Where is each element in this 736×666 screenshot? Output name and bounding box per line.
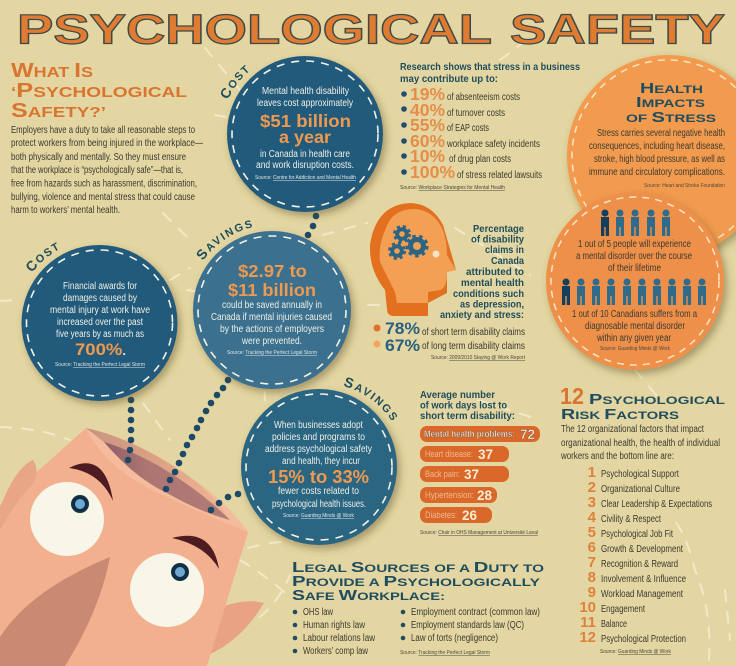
days lost bars — [420, 389, 540, 536]
label: cost: COST — [26, 242, 58, 271]
text: savings: $11 billion — [228, 280, 316, 300]
text: 1 of 10 — [572, 309, 697, 352]
heading: legal sources — [292, 560, 545, 604]
heading: what is — [11, 60, 187, 122]
text: 1 of 5: of their lifetime — [608, 263, 661, 274]
text: cost: Source: Tracking the Perfect Legal Storm — [55, 362, 145, 368]
claim stats — [374, 320, 526, 361]
text: 1 of 5: a mental disorder over the course — [576, 251, 692, 262]
law list: Law of torts (negligence) — [411, 633, 498, 644]
law list: Source: Tracking the Perfect Legal Storm — [400, 650, 490, 656]
labels: of drug plan costs — [449, 154, 511, 165]
text: cost: Source: Centre for Addiction and Mental Health — [255, 175, 356, 181]
heading: percentage: as depression, — [460, 298, 524, 310]
bullets — [401, 91, 407, 175]
text: cost: mental injury at work have — [50, 305, 150, 316]
numbers: 5 — [588, 524, 596, 541]
numbers: 2 — [588, 479, 596, 496]
heading: percentage: attributed to — [466, 266, 524, 278]
text: savings: $2.97 to — [238, 261, 307, 281]
law list: Employment standards law (QC) — [411, 620, 524, 631]
left eyebrow — [69, 463, 113, 501]
intro text — [560, 424, 720, 462]
numbers: 10 — [579, 599, 596, 616]
heading: average days: Average number — [420, 389, 495, 401]
stress text: Source: Heart and Stroke Foundation — [644, 183, 725, 189]
heading: what is: ‘PSYCHOLOGICAL — [11, 80, 187, 102]
numbers: 8 — [588, 569, 596, 586]
bar: heart disease: 37 — [478, 446, 493, 462]
text: savings: by the actions of employers — [220, 324, 324, 335]
heading: percentage: mental health — [461, 277, 524, 289]
heading: percentage: claims in — [485, 244, 524, 256]
labels — [400, 92, 542, 191]
text: savings: fewer costs related to — [278, 486, 359, 497]
percentages: 55% — [410, 115, 445, 135]
claim stats: of long term disability claims — [422, 341, 525, 352]
text: 1 of 10: Source: Guarding Minds @ Work — [600, 346, 670, 352]
percentages: 100% — [410, 162, 455, 182]
labels: of absenteeism costs — [447, 92, 520, 103]
paragraph: both physically and mentally. So they must ensure — [11, 152, 186, 163]
text: cost: five years by as much as — [56, 329, 144, 340]
orange circle: health impacts of stress — [567, 55, 736, 257]
rim band — [86, 428, 248, 532]
bar: hypertension: 28 — [477, 487, 492, 503]
bar: back pain: 37 — [464, 466, 479, 482]
bar: back pain — [420, 466, 509, 482]
circle: cost 51 billion — [220, 56, 390, 220]
factor list — [600, 469, 712, 655]
law list: Workers’ comp law — [303, 646, 369, 657]
text: cost: Financial awards for — [63, 281, 138, 292]
text: cost: leaves cost approximately — [257, 98, 353, 109]
paragraph: bullying, violence and mental stress that could cause — [11, 192, 195, 203]
text: cost: in Canada in health care — [260, 149, 350, 160]
risk factors — [560, 383, 725, 655]
factor list: Balance — [601, 619, 627, 630]
legal sources — [292, 560, 545, 657]
percentages: 10% — [410, 146, 445, 166]
numbers: 3 — [588, 494, 596, 511]
heading: percentage: Percentage — [473, 223, 524, 235]
text: savings: could be saved annually in — [222, 300, 322, 311]
text: 1 of 5 — [576, 239, 692, 274]
text: savings: Source: Tracking the Perfect Legal Storm — [227, 350, 317, 356]
gears — [390, 226, 427, 258]
factor list: Source: Guarding Minds @ Work — [600, 649, 671, 655]
heading: research: Research shows that stress in a business — [400, 62, 580, 73]
labels: of EAP costs — [447, 123, 489, 134]
text: savings: Source: Guarding Minds @ Work — [283, 513, 354, 519]
paragraph — [11, 125, 203, 216]
research stats — [400, 62, 580, 191]
heading: health impacts: IMPACTS — [636, 95, 705, 111]
text: 1 of 10: diagnosable mental disorder — [585, 321, 686, 332]
law list — [303, 607, 540, 657]
text: cost — [255, 86, 356, 181]
text: 1 of 10: within any given year — [596, 333, 672, 344]
factor list: Recognition & Reward — [601, 559, 678, 570]
heading: what is: SAFETY?’ — [11, 100, 106, 122]
percentages: 19% — [410, 84, 445, 104]
disability claims text — [374, 223, 526, 361]
heading: percentage: Canada — [491, 255, 524, 267]
text: savings: When businesses adopt — [274, 420, 363, 431]
factor list: Psychological Protection — [601, 634, 686, 645]
label: savings: SAVINGS — [196, 220, 252, 260]
title: SAFETY — [510, 6, 725, 52]
text: cost: $51 billion — [260, 111, 351, 131]
text: savings: psychological health issues. — [272, 499, 366, 510]
labels: of turnover costs — [447, 108, 505, 119]
text: savings — [265, 420, 372, 519]
labels: workplace safety incidents — [446, 139, 540, 150]
law list: Labour relations law — [303, 633, 376, 644]
numbers: 7 — [588, 554, 596, 571]
circle: cost 700 percent — [20, 242, 185, 410]
bar: heart disease: Heart disease: — [425, 449, 473, 460]
text: savings: were prevented. — [241, 336, 302, 347]
paragraph: harm to workers’ mental health. — [11, 205, 120, 216]
bar: heart disease — [420, 446, 509, 462]
claim stats: 67% — [385, 337, 420, 355]
bar: mental health — [420, 426, 540, 442]
claim stats: of short term disability claims — [422, 327, 525, 338]
text: cost: damages caused by — [63, 293, 137, 304]
heading: legal sources: L EGAL S OURCES OF A D UTY TO — [292, 560, 545, 576]
paragraph: Employers have a duty to take all reasonable steps to — [11, 125, 195, 136]
heading: percentage: conditions such — [453, 288, 524, 300]
factor list: Organizational Culture — [601, 484, 680, 495]
heading: 12 risk factors — [560, 383, 725, 423]
heading: health impacts — [626, 81, 716, 126]
text: savings: 15% to 33% — [268, 467, 369, 487]
source: days lost: Source: Chair in OHS Management at Université Laval — [420, 530, 538, 536]
right eyebrow — [172, 536, 219, 569]
text: savings: and health, they incur — [282, 456, 361, 467]
numbers — [579, 464, 597, 646]
factor list: Workload Management — [601, 589, 683, 600]
heading: research — [400, 62, 580, 85]
head icon with gears — [370, 203, 456, 316]
heading: health impacts: H EALTH — [640, 81, 703, 97]
text: cost: and work disruption costs. — [256, 160, 354, 171]
heading: percentage: anxiety and stress: — [440, 309, 524, 321]
text: cost: Mental health disability — [262, 86, 349, 97]
labels: Source: Workplace Strategies for Mental Health — [400, 185, 505, 191]
law list: Employment contract (common law) — [411, 607, 540, 618]
heading: 12 risk factors: P SYCHOLOGICAL — [589, 392, 725, 408]
bar: diabetes — [420, 507, 492, 523]
factor list: Psychological Job Fit — [601, 529, 673, 540]
icon: 1 of 5 people — [601, 210, 670, 236]
factor list: Psychological Support — [601, 469, 679, 480]
text: 1 of 10: 1 out of 10 Canadians suffers from a — [572, 309, 697, 320]
claim stats: Source: 2009/2010 Staying @ Work Report — [431, 355, 526, 361]
heading: research: may contribute up to: — [400, 74, 498, 85]
stress text — [589, 128, 725, 189]
heading: percentage: of disability — [471, 234, 524, 246]
title: PSYCHOLOGICAL — [17, 6, 492, 52]
numbers: 6 — [588, 539, 596, 556]
numbers: 1 — [588, 464, 596, 481]
connector dots — [125, 213, 319, 513]
bar: diabetes: 26 — [462, 507, 477, 523]
bar: mental health: Mental health problems: — [424, 429, 515, 439]
circle: savings 2.97 to 11 billion — [192, 220, 358, 398]
percentages: 40% — [410, 100, 445, 120]
bar: hypertension: Hypertension: — [425, 490, 474, 501]
factor list: Growth & Development — [601, 544, 683, 555]
left ear — [0, 460, 36, 530]
factor list: Civility & Respect — [601, 514, 661, 525]
law list: OHS law — [303, 607, 334, 618]
icon: 1 of 10 people — [562, 278, 706, 305]
numbers: 11 — [580, 614, 596, 631]
bar: hypertension — [420, 487, 497, 503]
inner wall — [86, 428, 230, 520]
right eye — [130, 553, 204, 627]
text: cost — [50, 281, 150, 368]
factor list: Involvement & Influence — [601, 574, 686, 585]
title — [17, 6, 725, 52]
law list: Human rights law — [303, 620, 366, 631]
factor list: Engagement — [601, 604, 645, 615]
percentages — [410, 84, 455, 182]
right ear — [208, 601, 264, 655]
labels: of stress related lawsuits — [457, 170, 542, 181]
orange circle: prevalence of mental disorders — [546, 192, 724, 370]
bar: back pain: Back pain: — [425, 469, 460, 480]
percentages: 60% — [410, 131, 445, 151]
numbers: 9 — [588, 584, 596, 601]
paragraph: free from hazards such as harassment, discrimination, — [11, 178, 197, 190]
numbers: 12 — [579, 629, 596, 646]
text: savings: policies and programs to — [272, 432, 365, 443]
text: 1 of 5: 1 out of 5 people will experience — [578, 239, 691, 250]
numbers: 4 — [588, 509, 597, 526]
heading: legal sources: S AFE W ORKPLACE: — [292, 588, 445, 604]
cartoon head — [0, 428, 264, 666]
opening — [104, 442, 230, 520]
intro text: workers and the bottom line are: — [560, 451, 674, 462]
heading: 12 risk factors: R ISK F ACTORS — [561, 407, 679, 423]
label: cost: COST — [220, 64, 248, 98]
paragraph: that the workplace is “psychologically safe”—that is, — [11, 165, 183, 176]
heading: health impacts: OF S TRESS — [626, 110, 716, 126]
face — [0, 428, 248, 666]
heading: average days: of work days lost to — [420, 400, 507, 412]
bar: mental health: 72 — [520, 426, 535, 442]
text: savings — [211, 261, 332, 356]
heading: what is: W HAT IS — [11, 60, 93, 82]
list bullets — [293, 610, 405, 653]
label: savings: SAVINGS — [344, 378, 397, 420]
heading: average days — [420, 389, 515, 422]
heading: average days: short term disability: — [420, 410, 515, 422]
heading: legal sources: P ROVIDE A P SYCHOLOGICALLY — [292, 574, 541, 590]
text: cost: 700% . — [75, 340, 126, 359]
circle: savings 15 to 33 percent — [240, 378, 404, 554]
face shadow — [0, 557, 110, 666]
text: cost: increased over the past — [57, 317, 143, 328]
text: savings: address psychological safety — [265, 444, 372, 455]
paragraph: protect workers from being injured in the workplace— — [11, 138, 203, 149]
text: savings: Canada if mental injuries caused — [211, 312, 332, 323]
heading: percentage — [440, 223, 524, 321]
heading: 12 risk factors: 12 — [560, 383, 584, 409]
section: what is psychological safety — [11, 60, 203, 216]
claim stats: 78% — [385, 320, 420, 338]
text: cost: a year — [279, 127, 331, 147]
left eye — [30, 482, 104, 556]
bar: diabetes: Diabetes: — [425, 510, 457, 521]
